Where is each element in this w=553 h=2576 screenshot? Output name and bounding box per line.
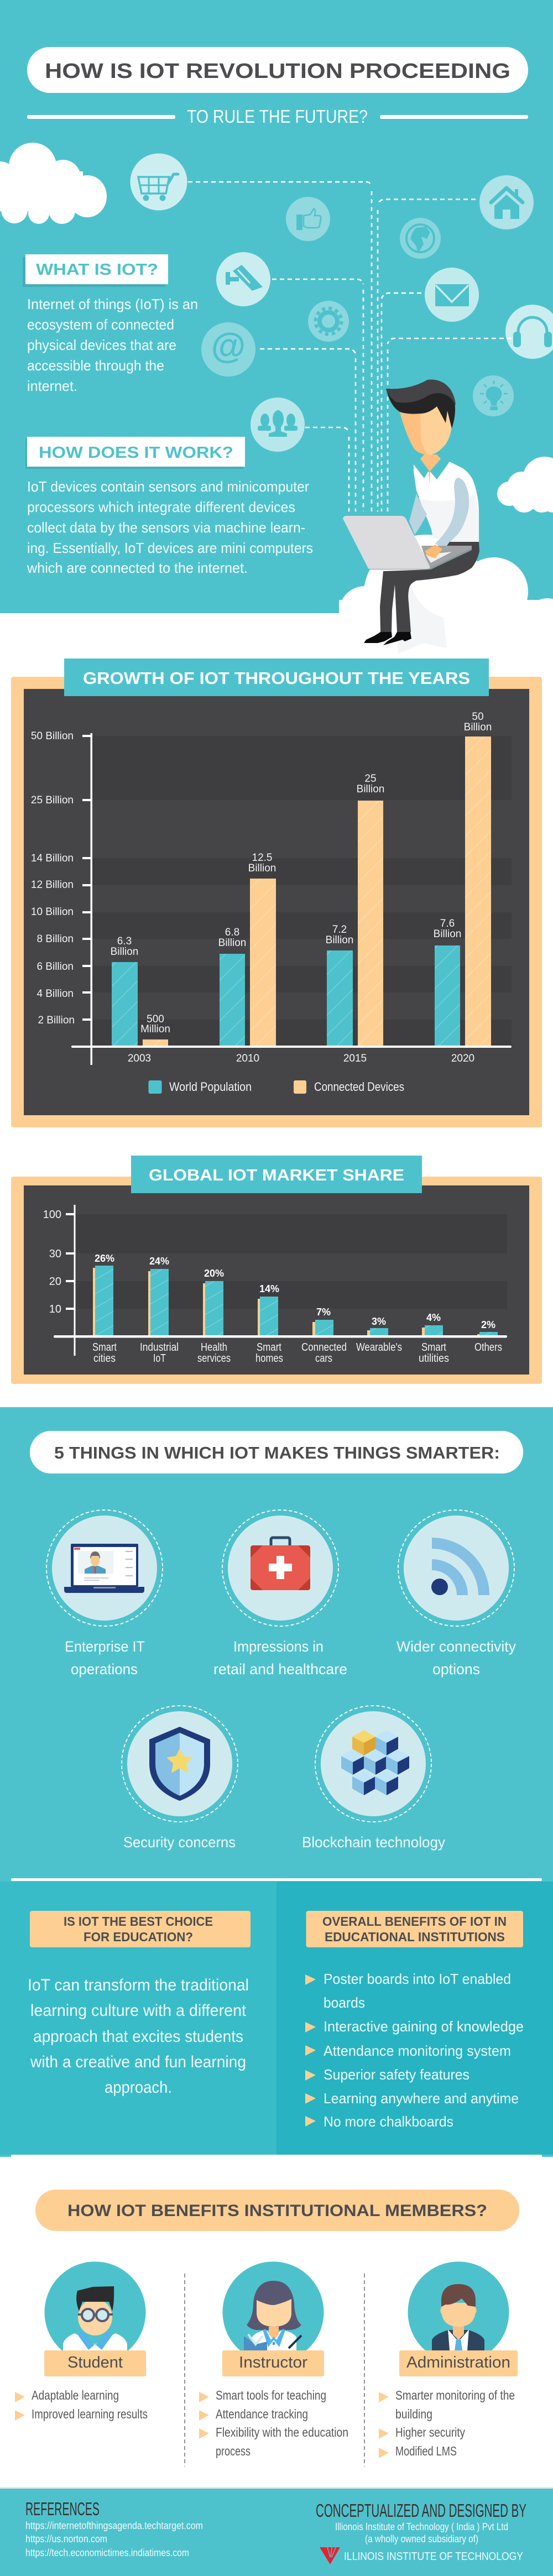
bullet markers <box>15 2392 25 2421</box>
panel body: approach. <box>105 2078 172 2097</box>
y axis labels: 10 Billion <box>31 906 74 918</box>
category labels: Smart <box>421 1341 446 1354</box>
title pill <box>27 47 528 93</box>
role label <box>222 2350 324 2376</box>
chart frame <box>11 677 542 1127</box>
cloud: under person <box>339 535 553 660</box>
label: retail and healthcare <box>213 1661 347 1678</box>
panel body: learning culture with a different <box>30 2002 247 2020</box>
icon: wifi signal <box>431 1543 484 1595</box>
panel body: IoT can transform the traditional <box>28 1976 249 1994</box>
category labels: services <box>197 1352 231 1365</box>
chart title banner: GLOBAL IOT MARKET SHARE <box>149 1167 404 1184</box>
y axis labels: 30 <box>49 1248 61 1260</box>
icon: thumbs up <box>286 197 330 241</box>
section: 5 things background <box>0 1407 553 1879</box>
label: Blockchain technology <box>302 1834 445 1851</box>
what is IoT heading <box>23 254 168 287</box>
label: operations <box>71 1661 138 1678</box>
y axis labels: 50 Billion <box>31 730 74 742</box>
benefits list: Attendance tracking <box>216 2407 308 2421</box>
divider <box>184 2274 185 2467</box>
percentage labels: 3% <box>372 1316 386 1327</box>
panel heading <box>30 1911 251 1947</box>
references: https://internetofthingsagenda.techtarget.com <box>25 2520 203 2531</box>
item: wider connectivity options <box>397 1510 516 1678</box>
how does it work body: IoT devices contain sensors and minicomputer <box>27 478 309 495</box>
bullet markers <box>379 2392 389 2458</box>
bar shadows <box>93 1268 483 1336</box>
panel body: with a creative and fun learning <box>30 2053 246 2071</box>
panel heading: FOR EDUCATION? <box>84 1930 193 1944</box>
divider <box>364 2274 365 2467</box>
credits: Illionois Institute of Technology ( India ) Pvt Ltd <box>335 2521 508 2532</box>
chart title banner: GROWTH OF IOT THROUGHOUT THE YEARS <box>83 668 470 688</box>
role label: Instructor <box>239 2354 307 2371</box>
y axis labels: 8 Billion <box>36 933 74 945</box>
category labels: Others <box>474 1341 502 1354</box>
label: Enterprise IT <box>65 1638 145 1655</box>
what is IoT heading: WHAT IS IOT? <box>36 261 158 279</box>
benefits list <box>395 2388 515 2458</box>
how does it work heading: HOW DOES IT WORK? <box>39 444 233 462</box>
logo: Illinois Institute of Technology <box>320 2547 340 2564</box>
y axis labels: 100 <box>43 1209 61 1221</box>
icon: house <box>479 175 534 229</box>
subtitle with rules <box>27 106 528 127</box>
panel heading <box>306 1911 523 1947</box>
chart board <box>24 689 529 1115</box>
label: options <box>432 1661 480 1678</box>
role label <box>399 2350 518 2376</box>
chart panel: global IoT market share <box>11 1156 542 1384</box>
category labels: cars <box>315 1352 332 1365</box>
icon: blockchain cubes <box>341 1730 409 1795</box>
bar value labels: 7.2 <box>332 924 347 936</box>
benefits list: Poster boards into IoT enabled <box>324 1971 511 1987</box>
panel heading: EDUCATIONAL INSTITUTIONS <box>325 1930 505 1944</box>
y axis labels <box>31 730 75 1026</box>
member: administration <box>379 2261 518 2458</box>
bar value labels: Million <box>140 1023 170 1035</box>
cloud: right <box>497 457 553 513</box>
legend: Connected Devices <box>314 1080 404 1094</box>
references: https://us.norton.com <box>25 2533 107 2544</box>
chart title banner <box>64 659 489 696</box>
y axis labels: 2 Billion <box>38 1015 75 1026</box>
bar value labels: Billion <box>464 722 492 733</box>
bar value labels: Billion <box>326 934 353 946</box>
chart title banner <box>131 1156 422 1193</box>
icon: people <box>251 398 305 452</box>
what is IoT body: ecosystem of connected <box>27 316 174 333</box>
chart board <box>24 1185 529 1375</box>
icon: administrator <box>432 2284 484 2350</box>
what is IoT body: physical devices that are <box>27 337 176 353</box>
benefits list <box>324 1971 524 2130</box>
category labels: Connected <box>301 1341 347 1354</box>
percentage labels: 4% <box>426 1312 441 1323</box>
credits: (a wholly owned subsidiary of) <box>365 2533 478 2544</box>
percentage labels: 24% <box>149 1256 169 1267</box>
icon: shopping cart <box>131 154 187 210</box>
axes <box>54 1205 507 1356</box>
dashed connector lines <box>188 182 512 511</box>
bars <box>95 1266 498 1336</box>
label <box>65 1638 145 1678</box>
what is IoT body <box>27 296 198 394</box>
y axis labels: 20 <box>49 1276 61 1288</box>
heading: institutional members: HOW IOT BENEFITS INSTITUTIONAL MEMBERS? <box>67 2202 487 2220</box>
panel heading: OVERALL BENEFITS OF IOT IN <box>322 1914 507 1929</box>
percentage labels: 14% <box>259 1283 279 1294</box>
y axis labels: 10 <box>49 1303 61 1315</box>
y axis labels: 14 Billion <box>31 853 74 864</box>
category labels: homes <box>255 1352 283 1365</box>
bar value labels: Billion <box>248 863 276 874</box>
icon: laptop <box>64 1544 144 1593</box>
benefits list: Improved learning results <box>32 2407 148 2421</box>
icon: shield <box>149 1727 210 1801</box>
benefits list: building <box>395 2407 432 2421</box>
percentage labels <box>95 1253 495 1330</box>
category labels: Health <box>201 1341 227 1354</box>
y axis labels: 25 Billion <box>31 795 74 806</box>
bar value labels: 50 <box>472 711 484 723</box>
title pill: HOW IS IOT REVOLUTION PROCEEDING <box>45 60 510 83</box>
what is IoT body: Internet of things (IoT) is an <box>27 296 198 312</box>
icon: light bulb <box>473 375 514 416</box>
header section background <box>0 0 553 613</box>
category labels: IoT <box>153 1352 166 1365</box>
heading: 5 things: 5 THINGS IN WHICH IOT MAKES THINGS SMARTER: <box>54 1443 500 1462</box>
panel: overall benefits <box>276 1882 553 2155</box>
references: REFERENCES <box>25 2499 100 2519</box>
role label: Administration <box>406 2354 510 2371</box>
benefits list: Modified LMS <box>395 2444 457 2458</box>
credits: ILLINOIS INSTITUTE OF TECHNOLOGY <box>344 2551 523 2563</box>
item: impressions in retail and healthcare <box>213 1510 347 1678</box>
how does it work body: collect data by the sensors via machine learn- <box>27 519 305 536</box>
member: student <box>15 2261 148 2421</box>
category labels: Industrial <box>140 1341 179 1354</box>
bar value labels: 500 <box>147 1013 164 1025</box>
credits <box>316 2500 526 2564</box>
x axis labels: 2020 <box>451 1053 474 1064</box>
chart frame <box>11 1177 542 1384</box>
benefits list: Smarter monitoring of the <box>395 2388 515 2402</box>
icon: at sign <box>201 322 255 377</box>
bars <box>112 736 491 1047</box>
label: Wider connectivity <box>397 1638 516 1655</box>
chart panel: growth of IoT <box>11 659 542 1127</box>
heading: 5 things <box>30 1431 523 1474</box>
what is IoT body: accessible through the <box>27 357 164 374</box>
category labels: utilities <box>419 1352 449 1365</box>
bar value labels: Billion <box>434 928 461 940</box>
references: https://tech.economictimes.indiatimes.com <box>25 2547 189 2558</box>
bar value labels: 25 <box>364 773 377 785</box>
what is IoT body: internet. <box>27 378 77 394</box>
references <box>25 2499 203 2558</box>
category labels: Smart <box>92 1341 117 1354</box>
section divider bar <box>0 1879 553 2157</box>
label <box>213 1638 347 1678</box>
item: enterprise IT operations <box>46 1510 163 1678</box>
how does it work body: ing. Essentially, IoT devices are mini computers <box>27 540 313 556</box>
bar value labels: Billion <box>218 937 246 949</box>
benefits list: Learning anywhere and anytime <box>324 2090 519 2107</box>
benefits list: process <box>216 2444 251 2458</box>
icon: first aid kit <box>251 1538 310 1590</box>
benefits list: Higher security <box>395 2425 465 2439</box>
role label <box>44 2350 146 2376</box>
benefits list: Adaptable learning <box>32 2388 119 2402</box>
icon: headphones <box>505 305 553 359</box>
icon: envelope <box>425 268 479 322</box>
background stripes <box>91 736 512 1047</box>
y axis labels <box>43 1209 61 1315</box>
bullet markers <box>199 2392 209 2439</box>
bullet markers <box>305 1974 316 2126</box>
item: security concerns <box>122 1706 238 1851</box>
bar value labels: Billion <box>357 783 384 795</box>
background stripes <box>75 1214 507 1309</box>
benefits list <box>32 2388 148 2421</box>
icon: student <box>63 2286 127 2350</box>
illustration: person with laptop <box>343 380 479 654</box>
icon: globe <box>400 218 441 259</box>
panel heading: IS IOT THE BEST CHOICE <box>64 1914 213 1929</box>
subtitle with rules: TO RULE THE FUTURE? <box>187 106 368 127</box>
white lower section corner mask <box>0 1878 553 2488</box>
bar value labels: 6.8 <box>225 927 239 938</box>
benefits list: Interactive gaining of knowledge <box>324 2018 524 2035</box>
y axis labels: 12 Billion <box>31 879 74 891</box>
benefits list: Superior safety features <box>324 2066 469 2083</box>
bar value labels: 7.6 <box>440 918 455 929</box>
axes <box>71 733 512 1065</box>
category labels: Wearable's <box>356 1341 402 1354</box>
percentage labels: 7% <box>316 1307 331 1318</box>
benefits list: No more chalkboards <box>324 2113 453 2130</box>
percentage labels: 2% <box>481 1319 495 1330</box>
y axis labels: 4 Billion <box>36 988 74 1000</box>
icon: gear <box>308 301 349 342</box>
benefits list: Attendance monitoring system <box>324 2042 511 2059</box>
item: blockchain technology <box>302 1706 445 1851</box>
legend: World Population <box>169 1080 252 1094</box>
percentage labels: 26% <box>95 1253 114 1264</box>
role label: Student <box>67 2354 123 2371</box>
how does it work body: processors which integrate different devices <box>27 499 295 515</box>
x axis labels: 2015 <box>343 1053 367 1064</box>
percentage labels: 20% <box>204 1268 224 1279</box>
label: Security concerns <box>123 1834 236 1851</box>
icon: instructor <box>244 2281 301 2350</box>
panel: is IoT the best choice <box>0 1882 276 2155</box>
category labels: cities <box>93 1352 116 1365</box>
benefits list <box>216 2388 348 2458</box>
heading: institutional members <box>35 2190 519 2231</box>
benefits list: Flexibility with the education <box>216 2425 348 2439</box>
x axis labels: 2003 <box>128 1053 151 1064</box>
y axis labels: 6 Billion <box>36 961 74 973</box>
benefits list: boards <box>324 1994 365 2011</box>
how does it work body <box>27 478 313 576</box>
category labels <box>92 1341 502 1365</box>
panel body <box>28 1976 249 2097</box>
footer <box>0 2487 553 2576</box>
bar value labels: 6.3 <box>117 936 132 947</box>
how does it work body: which are connected to the internet. <box>27 560 248 576</box>
icon: at sign: @ <box>211 326 246 365</box>
label: Impressions in <box>233 1638 324 1655</box>
how does it work heading <box>25 437 245 469</box>
x axis labels: 2010 <box>236 1053 259 1064</box>
category labels: Smart <box>257 1341 281 1354</box>
bar value labels: Billion <box>111 946 138 958</box>
cloud: top left <box>0 143 107 224</box>
benefits list: Smart tools for teaching <box>216 2388 326 2402</box>
member: instructor <box>199 2261 348 2458</box>
label <box>397 1638 516 1678</box>
icon: security camera <box>216 252 270 306</box>
bar value labels: 12.5 <box>252 852 272 864</box>
legend <box>148 1080 404 1094</box>
panel body: approach that excites students <box>33 2028 243 2046</box>
bar value labels <box>111 711 492 1035</box>
x axis labels <box>128 1053 474 1064</box>
